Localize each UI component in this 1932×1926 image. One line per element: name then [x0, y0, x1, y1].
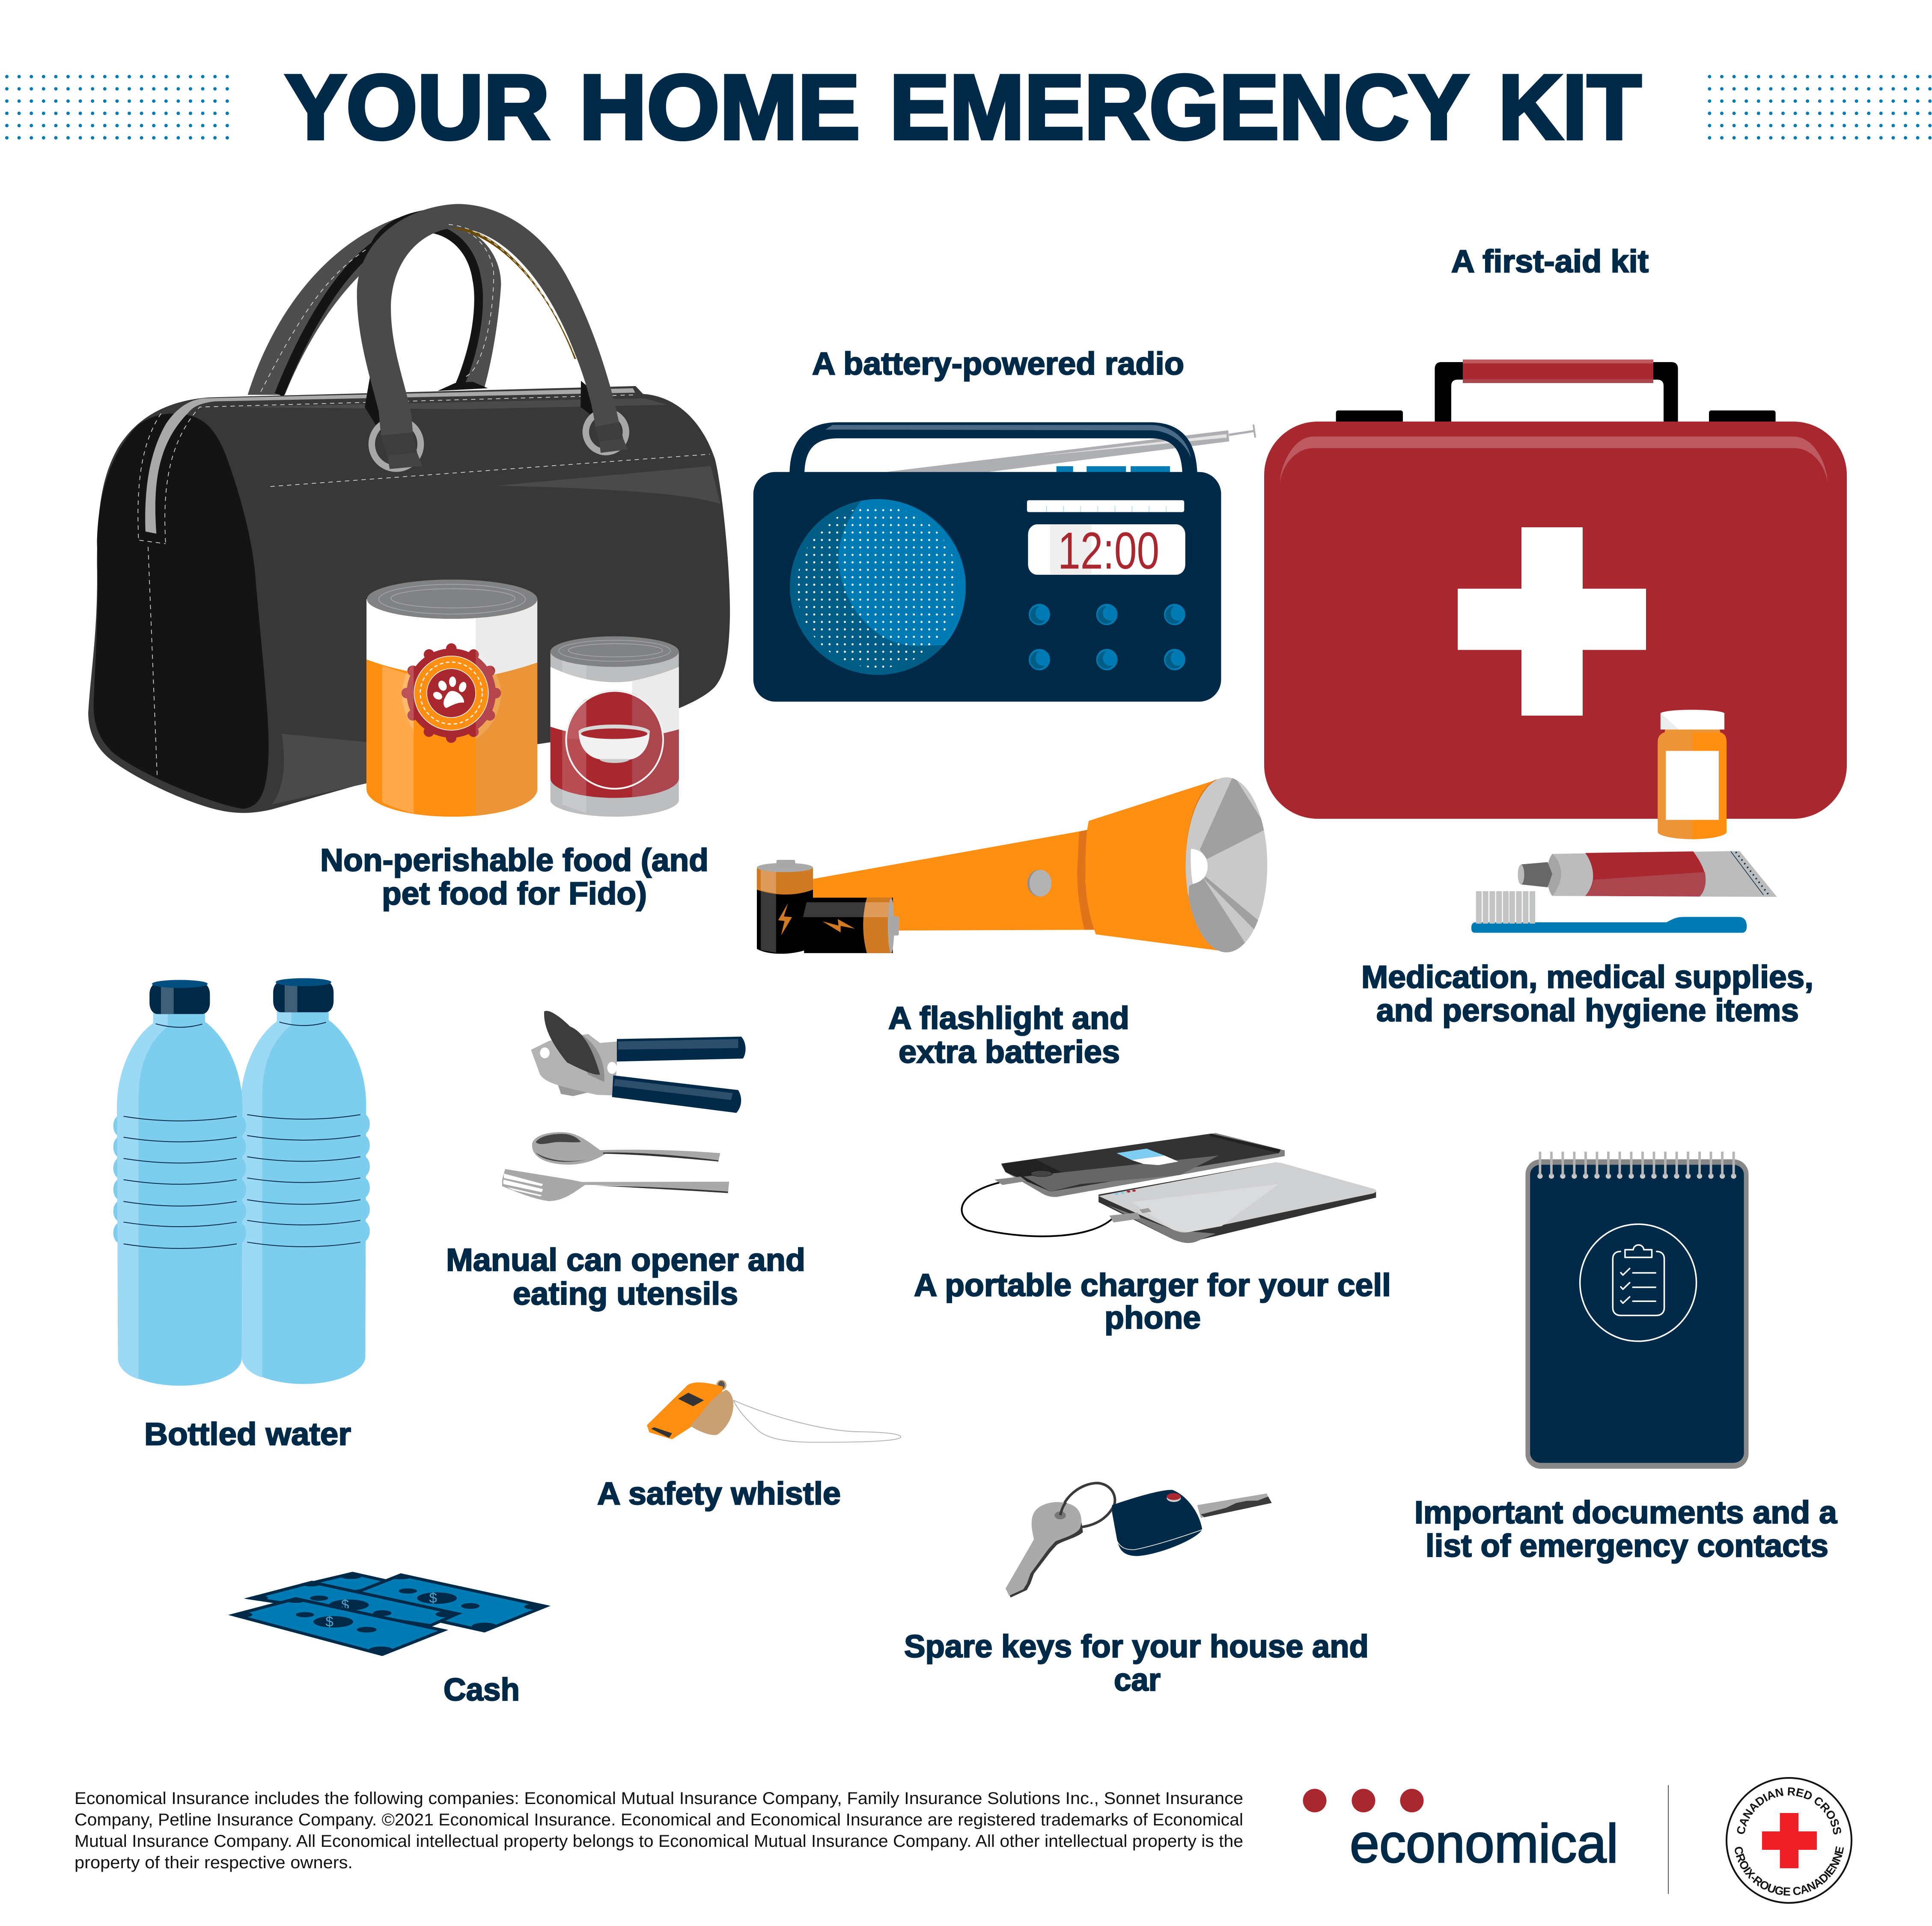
fork [502, 1169, 729, 1201]
label: cash: Cash [444, 1672, 520, 1707]
icon: water bottles [113, 978, 370, 1386]
spiral binding [1537, 1152, 1736, 1179]
right bill [357, 1573, 551, 1632]
radio body [753, 472, 1221, 701]
icon: duffel bag [88, 204, 730, 817]
label: whistle: A safety whistle [597, 1476, 841, 1511]
cash [228, 1573, 551, 1656]
flashlight [813, 775, 1267, 954]
decorative dot pattern: left [7, 77, 229, 138]
icon: medication and hygiene items [1471, 710, 1777, 933]
side panel [94, 413, 269, 809]
label: documents [1414, 1495, 1837, 1563]
logo divider [1668, 1785, 1669, 1894]
title: KIT [1498, 56, 1641, 158]
batteries [757, 860, 899, 954]
icon: cash and keys group [228, 1483, 1272, 1656]
spoon [532, 1132, 720, 1165]
label: documents: Important documents and a [1414, 1495, 1837, 1530]
label: charger: A portable charger for your cell [914, 1267, 1391, 1303]
icon: notebook [1525, 1152, 1748, 1469]
bag sheen [228, 398, 720, 805]
footer disclaimer: property of their respective owners. [74, 1853, 353, 1872]
label: charger: phone [1104, 1300, 1201, 1335]
label: can opener: Manual can opener and [446, 1242, 805, 1278]
speaker [790, 499, 966, 675]
label: can opener: eating utensils [513, 1276, 738, 1311]
white cross [1458, 527, 1646, 716]
radio knobs [1029, 604, 1185, 670]
power bank [1098, 1162, 1376, 1243]
label: bottled water: Bottled water [144, 1416, 351, 1452]
label: food [320, 842, 708, 911]
logo: Canadian Red Cross: CANADIAN RED CROSS [1734, 1785, 1844, 1836]
label: spare keys [904, 1629, 1369, 1697]
pill bottle [1658, 710, 1727, 839]
kit feet [1336, 410, 1776, 423]
case highlight [1280, 437, 1828, 483]
large can: pet food [366, 580, 537, 817]
house key [1006, 1483, 1115, 1598]
icon: utensils, charger and whistle group [502, 1011, 1376, 1442]
logo: Canadian Red Cross: CROIX-ROUGE CANADIENNE [1732, 1845, 1846, 1898]
icon: first-aid kit [1264, 360, 1847, 819]
back bill [285, 1573, 399, 1598]
soup bowl [578, 725, 650, 763]
label: charger [914, 1267, 1391, 1335]
label: flashlight: A flashlight and [888, 1000, 1129, 1036]
bag body [88, 386, 730, 813]
title: YOUR [285, 56, 550, 158]
logo: economical: economical [1350, 1813, 1618, 1874]
label: medication: and personal hygiene items [1376, 993, 1799, 1028]
label: first-aid kit: A first-aid kit [1451, 244, 1649, 279]
charging cable [962, 1177, 1112, 1236]
antenna [886, 425, 1255, 472]
radio [753, 425, 1255, 701]
label: spare keys: Spare keys for your house and [904, 1629, 1369, 1664]
label: flashlight [888, 1000, 1129, 1070]
label: food: pet food for Fido) [382, 876, 647, 911]
label: documents: list of emergency contacts [1426, 1528, 1828, 1563]
front handle [357, 204, 628, 469]
back handle [248, 208, 501, 395]
logo: economical [1303, 1789, 1618, 1874]
footer disclaimer: Economical Insurance includes the following companies: Economical Mutual Insurance Company, Family Insurance Solutions Inc., Sonnet Insurance [74, 1789, 1243, 1808]
clock display: 12:00 [1058, 522, 1159, 580]
right bill: $ [429, 1590, 437, 1606]
title: EMERGENCY [890, 56, 1469, 158]
icon: radio and flashlight group [753, 425, 1267, 954]
stitching [138, 226, 710, 778]
small can: soup [551, 636, 679, 817]
toothpaste tube [1518, 851, 1777, 897]
middle bill: $ [341, 1597, 349, 1613]
clipboard checklist icon [1580, 1224, 1697, 1341]
label: medication [1361, 959, 1813, 1028]
decorative dot pattern: right [1709, 77, 1932, 138]
tuner scale [1027, 500, 1184, 512]
footer disclaimer: Mutual Insurance Company. All Economical intellectual property belongs to Economical Mutual Insurance Company. All other intellectual property is the [74, 1832, 1243, 1851]
can opener [531, 1011, 746, 1113]
footer disclaimer [74, 1789, 1243, 1872]
logo: Canadian Red Cross [1727, 1778, 1852, 1903]
middle bill [244, 1581, 462, 1627]
car key fob [1112, 1490, 1272, 1556]
label: spare keys: car [1114, 1662, 1161, 1697]
front bill [228, 1597, 448, 1656]
zipper [145, 388, 635, 534]
label: radio: A battery-powered radio [812, 346, 1184, 381]
top buttons [1057, 466, 1170, 473]
kit handle [1435, 360, 1678, 422]
title: HOME [579, 56, 860, 158]
label: medication: Medication, medical supplies, [1361, 959, 1813, 995]
whistle [647, 1380, 901, 1442]
front bill: $ [325, 1614, 333, 1630]
paw badge [402, 648, 501, 739]
label: can opener [446, 1242, 805, 1311]
handle [797, 430, 1190, 475]
title [285, 56, 1641, 158]
footer disclaimer: Company, Petline Insurance Company. ©2021 Economical Insurance. Economical and Economical Insurance are registered trademarks of Economical [74, 1810, 1243, 1829]
toothbrush [1471, 891, 1747, 933]
label: flashlight: extra batteries [899, 1034, 1120, 1070]
kit case [1264, 422, 1847, 819]
label: food: Non-perishable food (and [320, 842, 708, 878]
phone [1001, 1133, 1285, 1197]
